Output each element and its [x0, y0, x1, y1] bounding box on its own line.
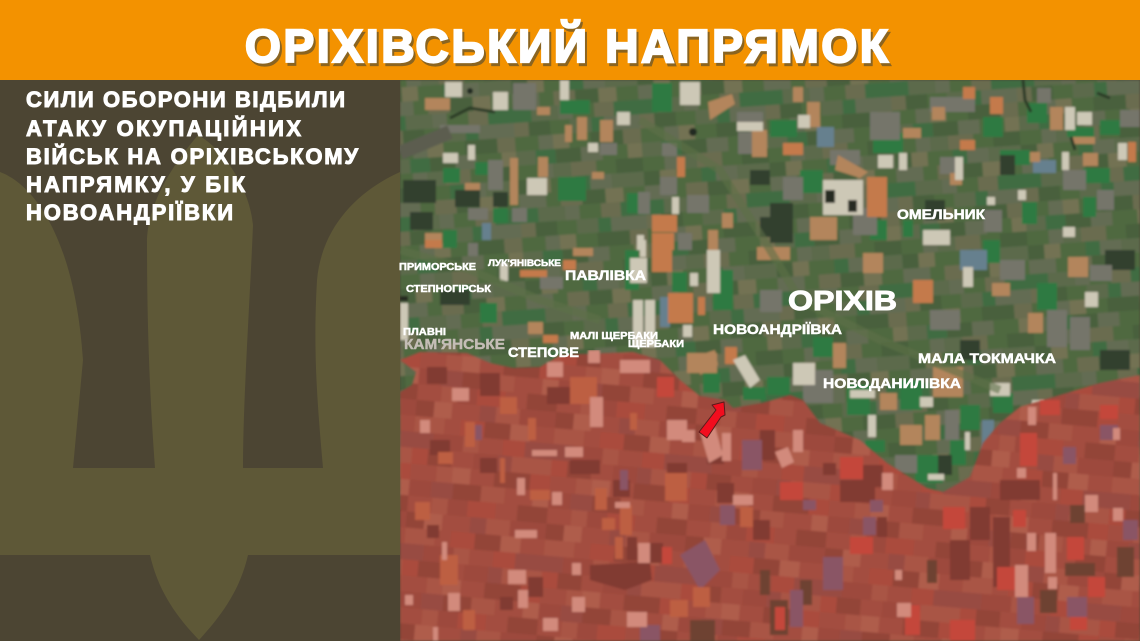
map labels: settlements: КАМ'ЯНСЬКЕ — [404, 337, 505, 353]
map labels: settlements: ЩЕРБАКИ — [628, 338, 684, 350]
map labels: settlements: СТЕПОВЕ — [508, 344, 579, 360]
map labels: settlements: ОРІХІВ — [788, 285, 897, 316]
panel: satellite map — [400, 80, 1140, 641]
occupied fields in red tint — [400, 350, 1140, 641]
map labels: settlements: НОВОДАНИЛІВКА — [823, 375, 961, 391]
map labels: settlements: НОВОАНДРІЇВКА — [713, 321, 842, 337]
text block: summary: СИЛИ ОБОРОНИ ВІДБИЛИ — [26, 87, 345, 112]
map labels: settlements: МАЛА ТОКМАЧКА — [918, 350, 1056, 366]
map labels: settlements: ПРИМОРСЬКЕ — [399, 261, 476, 273]
map labels: settlements — [399, 207, 1056, 391]
icon: trident emblem — [0, 135, 400, 640]
text block: summary: НАПРЯМКУ, У БІК — [26, 172, 246, 197]
map labels: settlements: ОМЕЛЬНИК — [897, 207, 986, 222]
arrow: attack direction — [699, 402, 725, 438]
map labels: settlements: ПАВЛІВКА — [565, 267, 646, 283]
text block: summary: АТАКУ ОКУПАЦІЙНИХ — [26, 116, 301, 141]
map: occupied territory red zone — [400, 350, 1140, 641]
panel: left background — [0, 80, 400, 641]
map labels: settlements: ПЛАВНІ — [403, 326, 446, 338]
map: unoccupied territory fields — [400, 80, 1140, 510]
map labels: settlements: МАЛІ ЩЕРБАКИ — [570, 330, 658, 342]
map labels: settlements: ЛУК'ЯНІВСЬКЕ — [488, 258, 561, 269]
map labels: settlements: СТЕПНОГІРСЬК — [406, 283, 492, 295]
header bar — [0, 0, 1140, 80]
title: ОРІХІВСЬКИЙ НАПРЯМОК — [245, 20, 889, 72]
text block: summary: НОВОАНДРІЇВКИ — [26, 200, 233, 225]
text block: summary: ВІЙСЬК НА ОРІХІВСЬКОМУ — [26, 144, 358, 169]
text block: summary — [26, 87, 358, 225]
